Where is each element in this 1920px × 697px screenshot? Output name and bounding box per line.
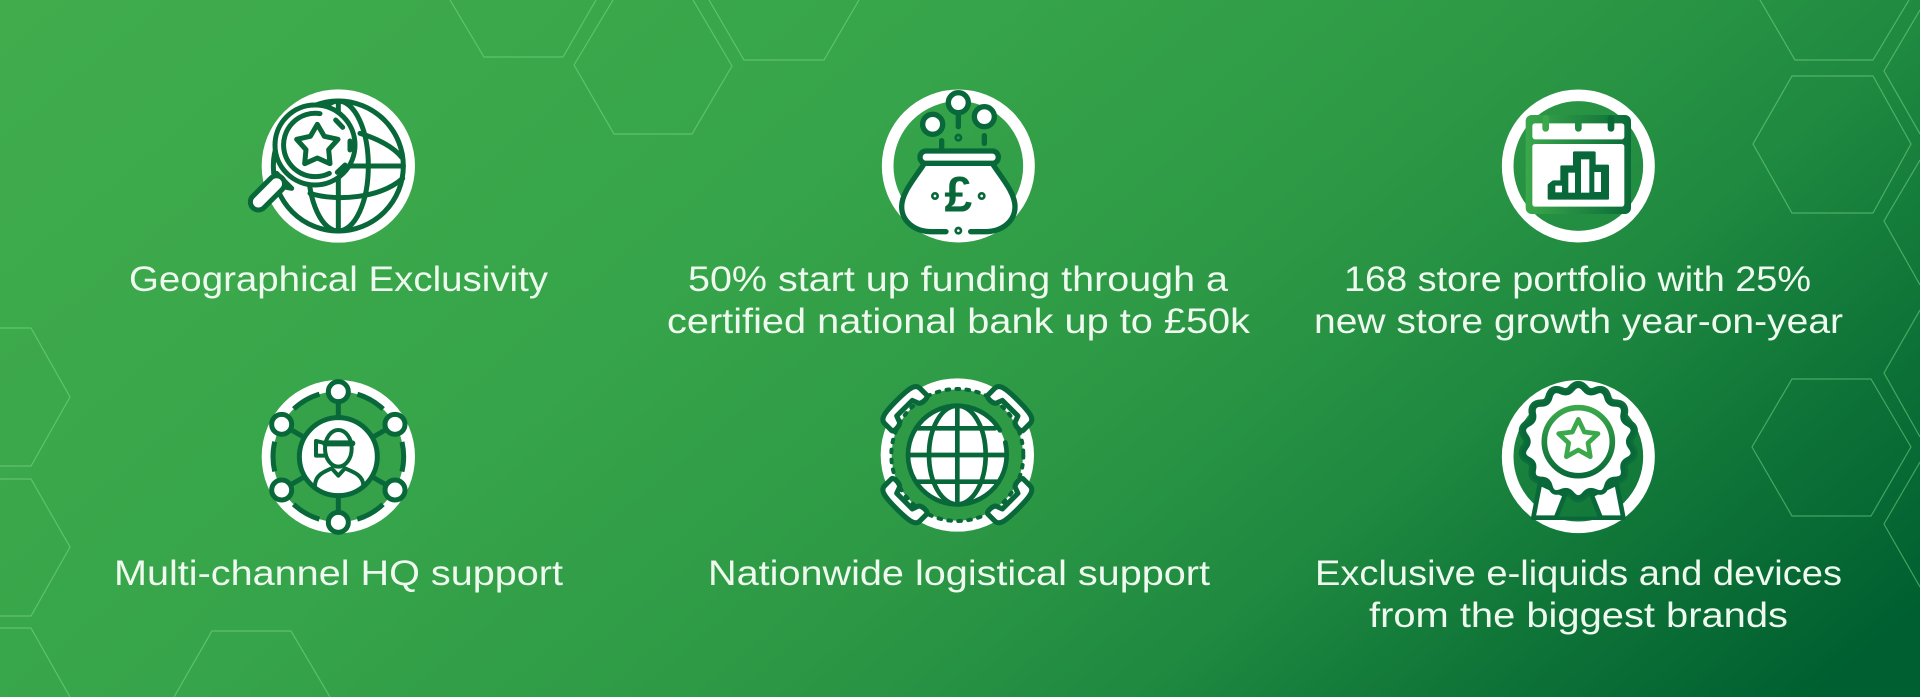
label: store portfolio: new store growth year-on-year bbox=[1314, 302, 1843, 341]
label: store portfolio bbox=[1314, 260, 1843, 341]
icon: globe with phone handsets bbox=[879, 378, 1036, 532]
icon: support network bbox=[262, 380, 415, 533]
label: multi-channel support: Multi-channel HQ support bbox=[114, 554, 563, 593]
icon: money bag with coins: £ bbox=[944, 167, 972, 223]
panel: store portfolio bbox=[1314, 95, 1843, 341]
label: exclusive brands: Exclusive e-liquids and devices bbox=[1315, 554, 1842, 593]
panel: exclusive brands bbox=[1315, 386, 1842, 635]
label: geographical exclusivity: Geographical Exclusivity bbox=[129, 260, 549, 299]
panel: start up funding bbox=[667, 93, 1251, 341]
icon: award rosette bbox=[1508, 386, 1649, 527]
label: store portfolio: 168 store portfolio with 25% bbox=[1344, 260, 1811, 299]
label: exclusive brands bbox=[1315, 554, 1842, 635]
label: exclusive brands: from the biggest brands bbox=[1369, 596, 1788, 635]
icon: money bag with coins bbox=[888, 93, 1029, 237]
panel: multi-channel support bbox=[114, 380, 563, 593]
label: logistical support: Nationwide logistical support bbox=[708, 554, 1210, 593]
icon: globe with magnifier bbox=[247, 89, 415, 243]
panel: geographical exclusivity bbox=[129, 89, 549, 299]
label: start up funding: certified national bank up to £50k bbox=[667, 302, 1251, 341]
panel: logistical support bbox=[708, 378, 1210, 593]
label: start up funding bbox=[667, 260, 1251, 341]
label: start up funding: 50% start up funding through a bbox=[688, 260, 1229, 299]
icon: calendar with bar chart bbox=[1508, 95, 1649, 237]
